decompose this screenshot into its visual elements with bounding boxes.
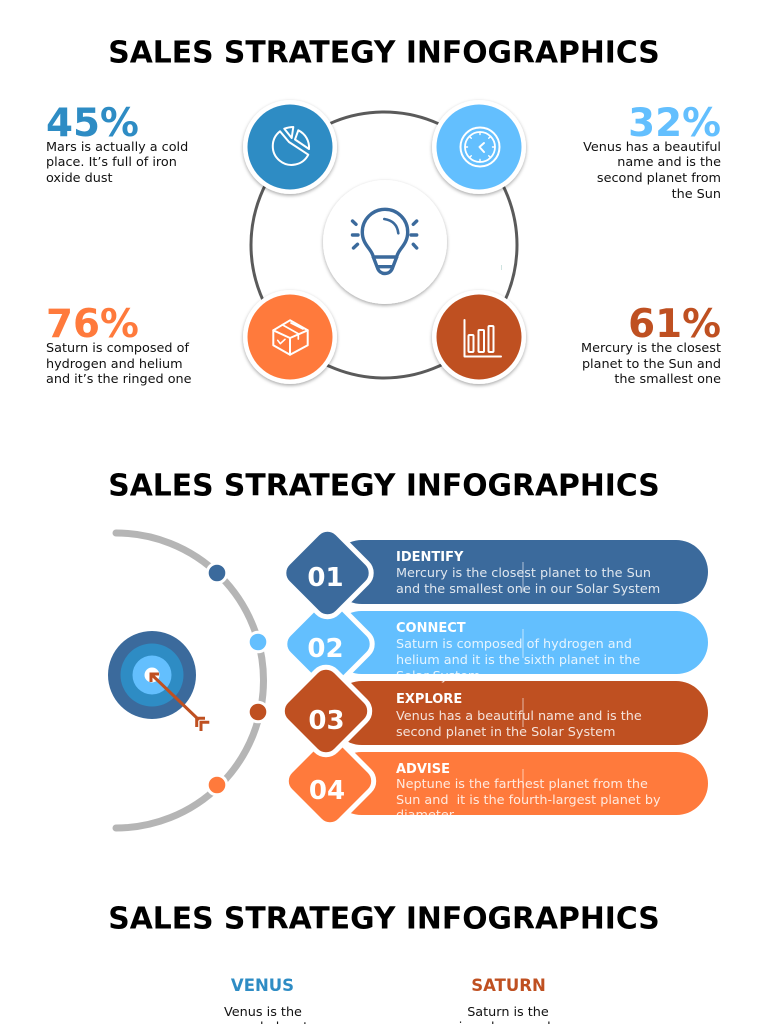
step text: advise: ADVISE [396, 762, 450, 777]
step text: identify: Mercury is the closest planet to the Sun [396, 566, 651, 581]
step text: identify [396, 550, 660, 597]
diamond 03: 03 [308, 706, 345, 736]
diamond 01: 01 [307, 563, 344, 593]
icon: bar chart badge [432, 290, 526, 384]
arc dot 4 [207, 775, 227, 795]
pill 03 [330, 681, 708, 745]
text block: 76% Saturn: hydrogen and helium [46, 357, 183, 372]
text block: Venus column: Venus is the [224, 1005, 302, 1020]
step text: connect [396, 621, 640, 684]
text block: 45% Mars: Mars is actually a cold [46, 140, 188, 155]
step text: advise: diameter [396, 808, 455, 823]
text block: Saturn column: Saturn is the [467, 1005, 549, 1020]
text block: 61% Mercury: the smallest one [614, 372, 721, 387]
text block: 76% Saturn: and it’s the ringed one [46, 372, 192, 387]
step text: connect: Solar System [396, 669, 480, 684]
diamond 02 [279, 595, 378, 693]
text block: 45% Mars: place. It’s full of iron [46, 155, 177, 170]
diamond 02: 02 [307, 634, 344, 664]
arc dot 3 [248, 702, 268, 722]
title: first section: SALES STRATEGY INFOGRAPHICS [108, 36, 660, 70]
text block: 32% Venus: the Sun [672, 187, 721, 202]
text block: 61% Mercury [581, 302, 721, 387]
step text: connect: CONNECT [396, 621, 466, 636]
step text: explore: EXPLORE [396, 692, 462, 707]
step text: identify: IDENTIFY [396, 550, 464, 565]
text block: 76% Saturn: Saturn is composed of [46, 341, 189, 356]
step text: advise [396, 762, 661, 823]
text block: 32% Venus [583, 101, 721, 202]
icon: target with arrow [108, 631, 209, 731]
text block: Saturn column: SATURN [471, 976, 546, 995]
icon: clock badge [432, 100, 526, 194]
text block: 32% Venus: second planet from [597, 171, 721, 186]
text block: 76% Saturn: 76% [46, 302, 139, 347]
icon: package box badge [243, 290, 337, 384]
panel: circular diagram [243, 100, 526, 384]
title: third section: SALES STRATEGY INFOGRAPHICS [108, 902, 660, 936]
icon: light bulb badge [323, 180, 447, 304]
text block: 45% Mars [46, 101, 188, 186]
pill 02 [330, 611, 708, 674]
text block: 76% Saturn [46, 302, 192, 387]
pill 01 [330, 540, 708, 604]
text block: Venus column [218, 976, 308, 1024]
step text: explore: Venus has a beautiful name and is the [396, 709, 642, 724]
step text: connect: Saturn is composed of hydrogen and [396, 637, 632, 652]
text block: 61% Mercury: planet to the Sun and [582, 357, 721, 372]
pill 04 [330, 752, 708, 815]
panel: step pills [277, 524, 708, 830]
diamond 01 [278, 524, 377, 622]
step text: identify: and the smallest one in our Solar System [396, 582, 660, 597]
diamond 03 [277, 662, 375, 760]
text block: 32% Venus: name and is the [617, 155, 721, 170]
text block: 32% Venus: 32% [628, 101, 721, 146]
diamond 04: 04 [309, 776, 345, 806]
arc dot 1 [207, 563, 227, 583]
text block: Saturn column [454, 976, 562, 1024]
text block: 45% Mars: oxide dust [46, 171, 113, 186]
text block: 32% Venus: Venus has a beautiful [583, 140, 721, 155]
title: second section: SALES STRATEGY INFOGRAPHICS [108, 468, 660, 504]
icon: pie chart badge [243, 100, 337, 194]
panel: arc with target [108, 533, 268, 828]
step text: advise: Sun and it is the fourth-largest planet by [396, 793, 661, 808]
diamond 04 [281, 732, 379, 830]
text block: 45% Mars: 45% [46, 101, 139, 146]
text block: 61% Mercury: Mercury is the closest [581, 341, 721, 356]
arc dot 2 [248, 632, 268, 652]
step text: connect: helium and it is the sixth planet in the [396, 653, 640, 668]
text block: Venus column: VENUS [231, 976, 294, 995]
step text: explore: second planet in the Solar System [396, 725, 616, 740]
text block: 61% Mercury: 61% [628, 302, 721, 347]
step text: explore [396, 692, 642, 740]
step text: advise: Neptune is the farthest planet from the [396, 777, 648, 792]
